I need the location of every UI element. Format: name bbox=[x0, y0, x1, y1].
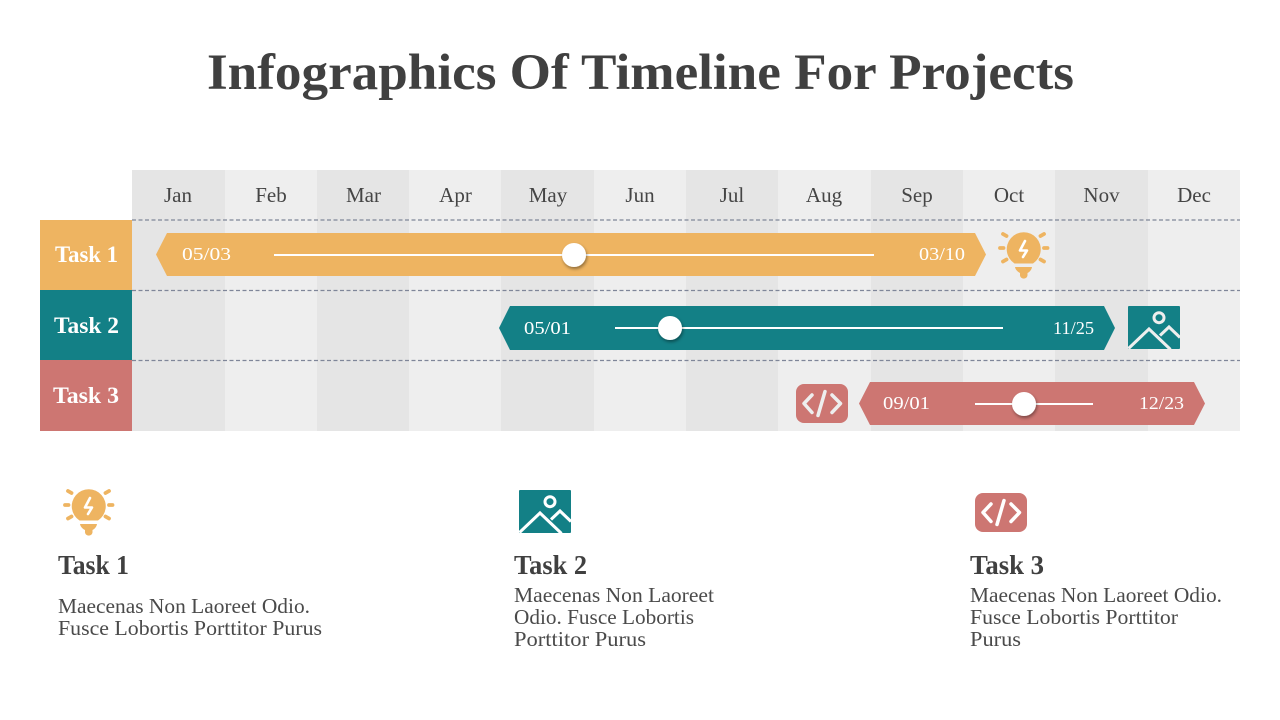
month labels: Mar bbox=[346, 183, 381, 207]
timeline bar: Task 1 bbox=[156, 233, 986, 276]
timeline bar: Task 3 bbox=[859, 382, 1205, 425]
row label: Task 2: Task 2 bbox=[54, 313, 119, 338]
month labels: Jan bbox=[164, 183, 192, 207]
detail: Task 1: Fusce Lobortis Porttitor Purus bbox=[58, 616, 322, 640]
detail: Task 2 bbox=[514, 490, 714, 651]
detail: Task 1: Maecenas Non Laoreet Odio. bbox=[58, 594, 310, 618]
timeline bar: Task 3: 12/23 bbox=[1139, 393, 1184, 413]
timeline bar: Task 2 bbox=[499, 306, 1115, 350]
detail: Task 3: Task 3 bbox=[970, 550, 1044, 580]
month labels: Oct bbox=[994, 183, 1024, 207]
timeline bar: Task 1: 03/10 bbox=[919, 244, 965, 264]
month labels: Sep bbox=[901, 183, 933, 207]
timeline bar: Task 2: 11/25 bbox=[1053, 318, 1094, 338]
icon: mountain picture, timeline bbox=[1128, 306, 1180, 350]
panel: month columns bbox=[132, 170, 1240, 431]
icon: light bulb bbox=[65, 489, 112, 536]
month labels: Jul bbox=[720, 183, 744, 207]
month labels: Nov bbox=[1083, 183, 1120, 207]
month labels bbox=[164, 183, 1211, 207]
detail: Task 3: Purus bbox=[970, 627, 1021, 651]
detail: Task 1 bbox=[58, 489, 322, 640]
month labels: May bbox=[529, 183, 568, 207]
detail: Task 2: Porttitor Purus bbox=[514, 627, 646, 651]
title: Infographics Of Timeline For Projects bbox=[207, 45, 1074, 101]
detail: Task 2: Maecenas Non Laoreet bbox=[514, 583, 714, 607]
row label: Task 1: Task 1 bbox=[55, 242, 118, 267]
month labels: Dec bbox=[1177, 183, 1211, 207]
icon: mountain picture bbox=[519, 490, 571, 534]
icon: code, timeline bbox=[796, 384, 848, 423]
row label: Task 1 bbox=[40, 220, 132, 290]
timeline bar: Task 2: 05/01 bbox=[524, 318, 571, 338]
row label: Task 3 bbox=[40, 360, 132, 431]
month labels: Aug bbox=[806, 183, 843, 207]
icon: code bbox=[975, 493, 1027, 532]
timeline bar: Task 3: 09/01 bbox=[883, 393, 930, 413]
row label: Task 2 bbox=[40, 290, 132, 360]
icon: light bulb, timeline bbox=[1000, 232, 1048, 279]
month labels: Jun bbox=[625, 183, 655, 207]
detail: Task 3: Maecenas Non Laoreet Odio. bbox=[970, 583, 1222, 607]
detail: Task 2: Task 2 bbox=[514, 550, 587, 580]
detail: Task 2: Odio. Fusce Lobortis bbox=[514, 605, 694, 629]
detail: Task 3 bbox=[970, 493, 1222, 651]
row label: Task 3: Task 3 bbox=[53, 383, 119, 408]
detail: Task 3: Fusce Lobortis Porttitor bbox=[970, 605, 1178, 629]
timeline bar: Task 1: 05/03 bbox=[182, 244, 231, 264]
month labels: Feb bbox=[255, 183, 287, 207]
month labels: Apr bbox=[439, 183, 472, 207]
detail: Task 1: Task 1 bbox=[58, 550, 129, 580]
